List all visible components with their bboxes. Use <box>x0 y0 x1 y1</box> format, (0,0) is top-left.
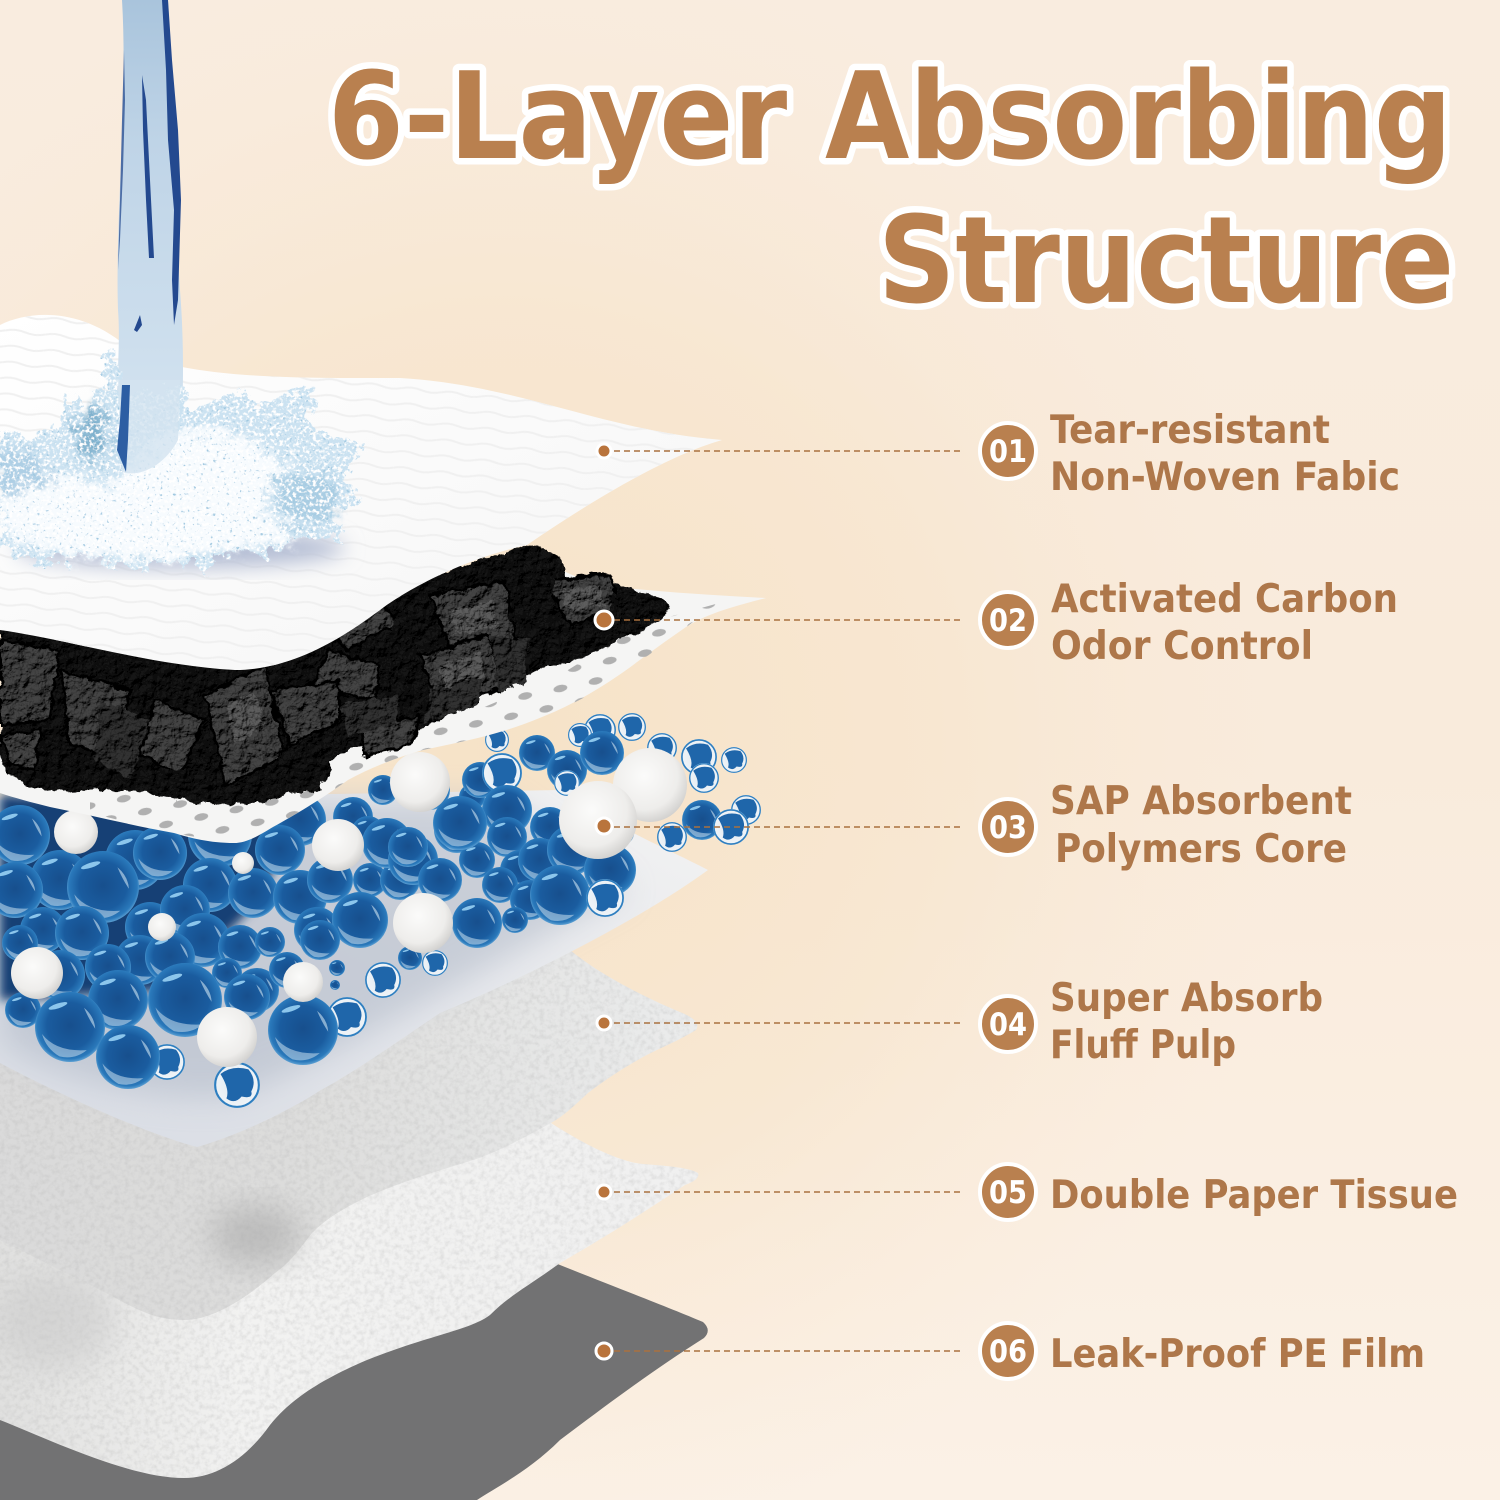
callout 03: Polymers Core <box>1055 827 1347 872</box>
title: 6-Layer Absorbing <box>328 48 1452 187</box>
layer 6: leak-proof PE film <box>0 1263 708 1500</box>
callout 02: Odor Control <box>1051 624 1313 669</box>
callout 03: SAP Absorbent <box>1050 779 1352 824</box>
callout 05: 05 <box>989 1175 1027 1211</box>
layer 3 sheet: SAP carrier <box>0 790 708 1147</box>
callout 06: Leak-Proof PE Film <box>1050 1332 1425 1377</box>
layer 4: super absorb fluff pulp <box>0 950 697 1320</box>
layer 2 perforations <box>90 600 730 839</box>
water splash <box>0 345 365 572</box>
callout 03: 03 <box>989 810 1027 846</box>
splash shadow <box>15 528 345 568</box>
title <box>328 48 1454 331</box>
water stream <box>117 0 183 473</box>
callout 04 <box>597 976 1323 1068</box>
layer 1: tear-resistant non-woven fabric <box>0 315 722 670</box>
callout 03 <box>596 779 1352 872</box>
water streaks <box>118 0 181 332</box>
dark ball mass <box>0 795 300 1000</box>
fluff fold shading <box>210 1205 300 1265</box>
callout 01: Non-Woven Fabic <box>1050 455 1400 500</box>
callout 05: Double Paper Tissue <box>1050 1173 1458 1218</box>
pouring water core <box>118 380 180 473</box>
callout 02 <box>595 577 1398 669</box>
ball shadows <box>0 800 630 1098</box>
callout 06 <box>596 1323 1425 1379</box>
layer 5: double paper tissue <box>0 1123 698 1478</box>
callout 01 <box>597 408 1400 500</box>
callout 01: Tear-resistant <box>1050 408 1330 453</box>
layer 3: SAP absorbent polymer balls <box>0 713 761 1108</box>
callout 05 <box>597 1164 1458 1220</box>
layer 2: perforated sheet <box>0 570 766 843</box>
callout 02: Activated Carbon <box>1051 577 1398 622</box>
callout 04: Super Absorb <box>1050 976 1323 1021</box>
callout 02: 02 <box>989 603 1027 639</box>
callout 04: 04 <box>989 1007 1027 1043</box>
callout 04: Fluff Pulp <box>1050 1023 1236 1068</box>
callout 01: 01 <box>989 434 1027 470</box>
callout 06: 06 <box>989 1334 1027 1370</box>
layer 2: activated carbon pile <box>0 545 669 804</box>
tissue fold shading <box>0 1270 115 1370</box>
title: Structure <box>878 192 1454 331</box>
